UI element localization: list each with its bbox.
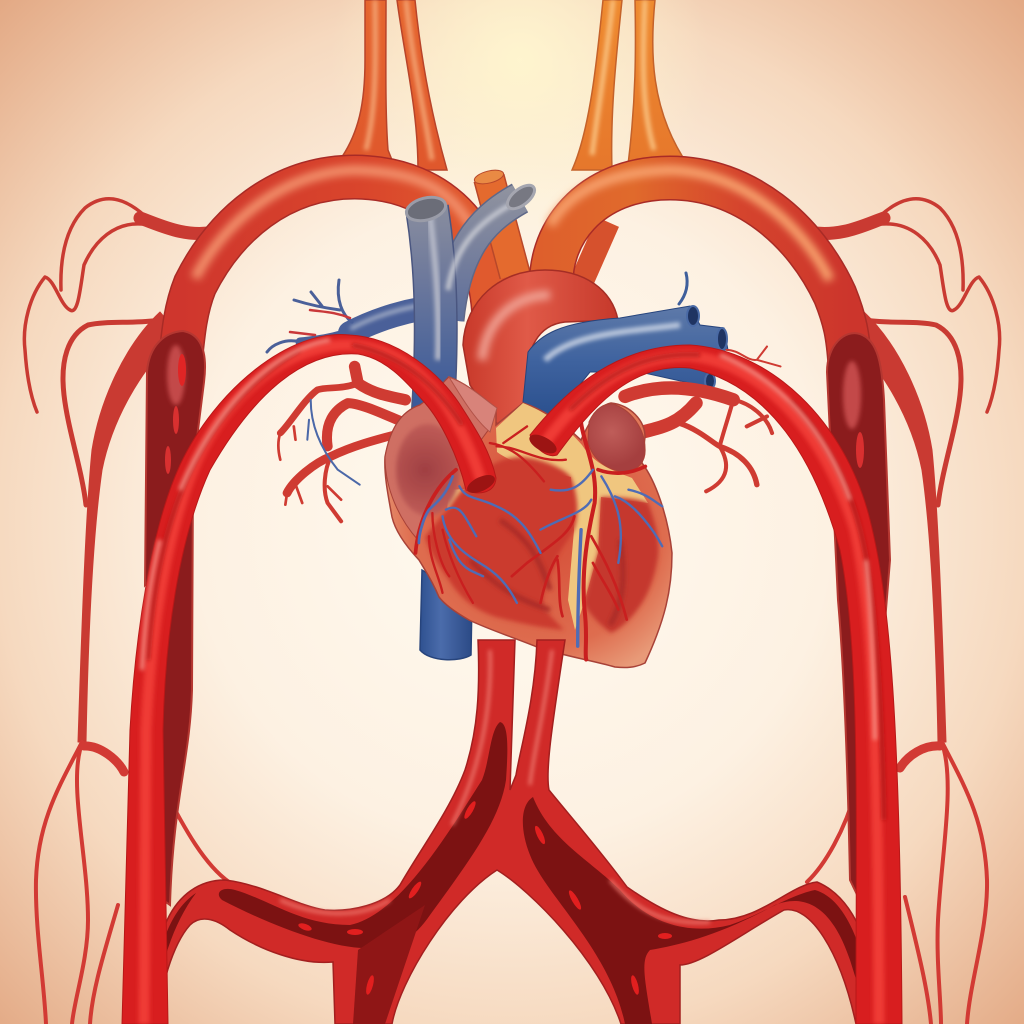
right lumen xyxy=(523,797,875,1024)
upper left arch xyxy=(180,170,494,365)
blood cells xyxy=(297,800,672,995)
right outer thin vessels xyxy=(807,199,1000,1024)
pulmonary artery trees xyxy=(278,346,781,521)
aortic small branch xyxy=(578,222,608,290)
left lumen xyxy=(219,722,507,949)
left outer thin vessels xyxy=(24,199,229,1024)
left side lumen xyxy=(148,893,196,1024)
coronary vessels xyxy=(415,423,662,660)
heart body xyxy=(385,377,672,668)
front left arching artery xyxy=(122,334,498,1024)
right mid branch xyxy=(846,312,961,742)
top vessels left xyxy=(336,0,447,170)
right lower limbs xyxy=(807,742,987,1024)
artery trunks xyxy=(147,640,880,1024)
superior vena cava xyxy=(404,181,539,410)
vessel openings xyxy=(404,193,448,225)
atrium flap xyxy=(449,377,497,432)
left dark artery column xyxy=(145,331,205,905)
upper right arch xyxy=(550,170,850,365)
background glow xyxy=(0,0,1024,300)
vena cava trunk xyxy=(427,208,436,410)
blue coronaries xyxy=(419,470,662,646)
lower branching arteries xyxy=(147,640,880,1024)
muscle shading xyxy=(470,520,623,625)
left pulmonary vein xyxy=(267,280,445,352)
right upper branch loops xyxy=(808,199,1000,412)
left upper branch loops xyxy=(24,199,215,412)
atrium shadow xyxy=(396,424,460,516)
left mid branch xyxy=(63,312,178,742)
left tree xyxy=(278,366,405,521)
right tree xyxy=(625,346,781,491)
central orange vessel xyxy=(473,168,515,275)
top vessels right xyxy=(572,0,688,170)
aortic arch over heart xyxy=(463,270,618,425)
left lower limbs xyxy=(36,742,229,1024)
vena cava branch xyxy=(448,198,520,320)
artery highlights xyxy=(280,650,710,923)
heart xyxy=(385,377,672,668)
right pulmonary vein xyxy=(522,273,728,418)
red coronaries xyxy=(415,423,645,660)
front right arching artery xyxy=(526,345,902,1024)
fat layer xyxy=(447,403,648,630)
right atrium xyxy=(385,377,496,540)
left lumen lower xyxy=(353,905,425,1024)
left ventricle muscle xyxy=(425,457,577,630)
right dark artery column xyxy=(827,333,890,905)
vein openings xyxy=(687,306,699,326)
right ventricle muscle xyxy=(584,497,658,633)
inferior vena cava xyxy=(420,570,472,660)
right auricle xyxy=(588,404,645,472)
